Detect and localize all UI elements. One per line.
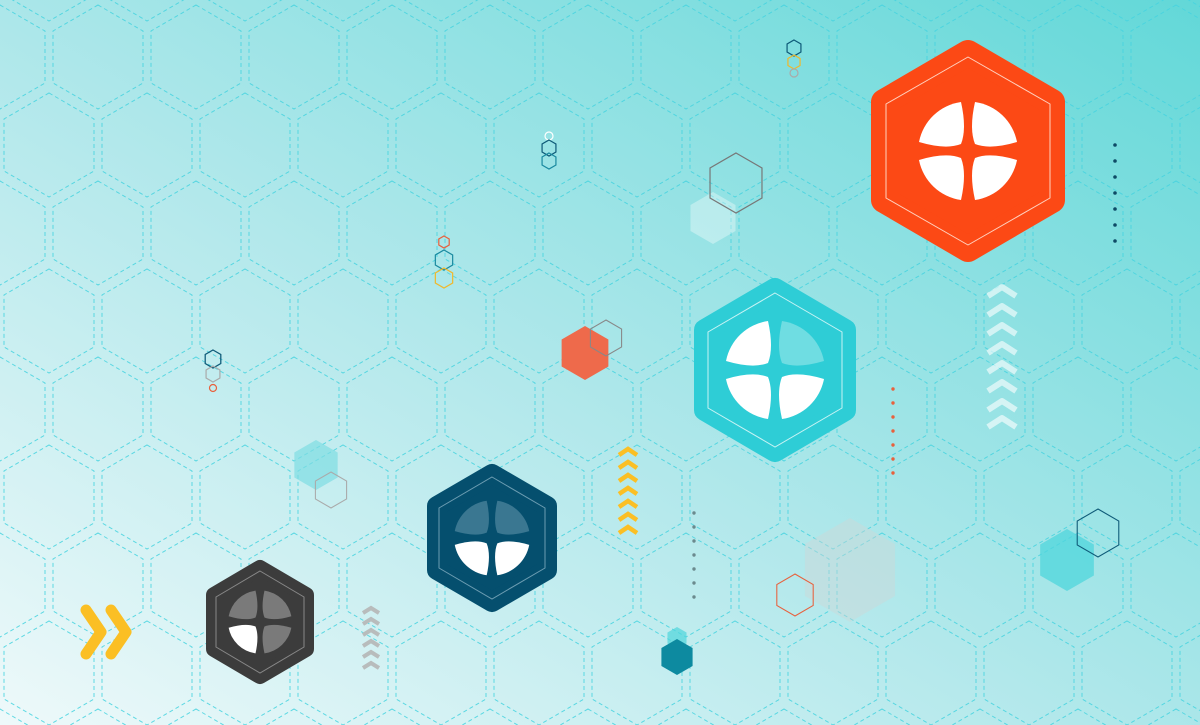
decorative hexes — [294, 153, 1119, 675]
chevrons: yellow right — [86, 610, 126, 654]
small hex chains — [205, 40, 801, 392]
chevrons: yellow up — [619, 449, 637, 533]
badge: orange — [884, 53, 1052, 249]
chevrons: white up — [988, 287, 1016, 427]
dot columns — [692, 143, 1117, 599]
icon: logo — [455, 501, 529, 575]
badge: navy — [437, 474, 547, 602]
icon: logo — [229, 591, 291, 653]
icon: logo — [919, 102, 1017, 200]
icon: logo — [726, 321, 824, 419]
badge: dark gray — [214, 568, 306, 676]
chevrons: gray up — [363, 608, 379, 668]
badge: teal — [705, 289, 845, 451]
